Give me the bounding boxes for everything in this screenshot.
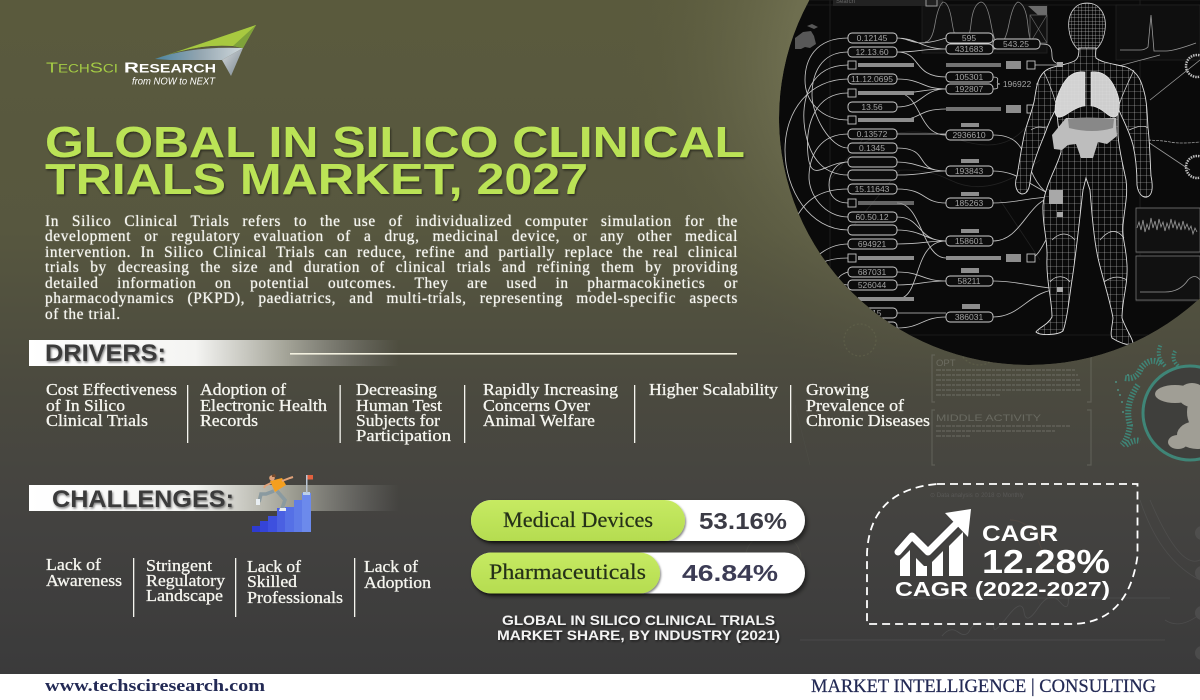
pill readouts column 2: 105301 xyxy=(955,72,983,82)
challenges heading: CHALLENGES: xyxy=(52,486,234,513)
description paragraph: development or regulatory evaluation of a drug, medicinal device, or any other medical xyxy=(45,228,738,245)
description paragraph: detailed information on potential outcomes. They are used in pharmacokinetics or xyxy=(45,275,738,292)
driver: animal welfare: Concerns Over xyxy=(483,396,591,415)
CAGR dashed callout: CAGR (2022-2027) xyxy=(895,579,1110,601)
drivers heading: DRIVERS: xyxy=(45,340,166,367)
driver: animal welfare: Rapidly Increasing xyxy=(483,380,618,399)
pill readouts column 2 xyxy=(946,33,1040,322)
footer xyxy=(0,674,1200,700)
logo xyxy=(46,25,256,88)
lungs xyxy=(1055,72,1119,117)
challenge: lack of awareness: Awareness xyxy=(46,571,122,590)
challenge: lack of adoption: Adoption xyxy=(364,573,431,592)
pill readouts column 1: 12.13.60 xyxy=(855,47,889,57)
description paragraph: trials by decreasing the size and duration of clinical trials and refining them by providing xyxy=(45,259,738,276)
pill readouts column 1: 60.50.12 xyxy=(855,212,889,222)
driver: cost effectiveness: Clinical Trials xyxy=(46,411,148,430)
pill readouts column 1: 0.13572 xyxy=(857,129,888,139)
abdominal organs xyxy=(1052,118,1117,158)
share caption: MARKET SHARE, BY INDUSTRY (2021) xyxy=(497,628,780,643)
waveform top xyxy=(925,2,1036,45)
pill readouts column 1: 687031 xyxy=(858,267,886,277)
driver: chronic diseases: Prevalence of xyxy=(806,396,905,415)
pill readouts column 2: 595 xyxy=(962,33,976,43)
connector lines xyxy=(785,38,1070,328)
driver: decreasing human test subjects: Participation xyxy=(356,426,451,445)
challenges heading xyxy=(29,485,399,513)
CAGR dashed callout: 12.28% xyxy=(982,543,1110,580)
challenge: stringent regulatory landscape: Regulatory xyxy=(146,571,226,590)
driver: decreasing human test subjects: Human Test xyxy=(356,396,442,415)
ghost HUD panels behind content xyxy=(745,324,1200,660)
description paragraph: pharmacodynamics (PKPD), paediatrics, and multi-trials, representing model-specific aspects xyxy=(45,290,738,307)
challenge: lack of skilled professionals: Lack of xyxy=(247,557,302,576)
pill readouts column 2: 185263 xyxy=(955,198,983,208)
pill readouts column 2: 431683 xyxy=(955,44,983,54)
driver: electronic health records: Electronic Health xyxy=(200,396,328,415)
driver: cost effectiveness: of In Silico xyxy=(46,396,125,415)
description paragraph: intervention. In Silico Clinical Trials can reduce, refine and partially replace the real clinical xyxy=(45,244,738,261)
driver: decreasing human test subjects: Decreasing xyxy=(356,380,437,399)
challenge: lack of awareness xyxy=(46,555,122,590)
right side charts xyxy=(1120,15,1200,292)
challenge: lack of skilled professionals: Skilled xyxy=(247,572,298,591)
title xyxy=(45,118,745,204)
pill readouts column 2: 192807 xyxy=(955,84,983,94)
share caption: GLOBAL IN SILICO CLINICAL TRIALS xyxy=(502,613,775,628)
driver: animal welfare xyxy=(483,380,618,430)
logo: from NOW to NEXT xyxy=(132,76,216,88)
challenge: stringent regulatory landscape: Landscape xyxy=(146,586,223,605)
footer: MARKET INTELLIGENCE | CONSULTING xyxy=(811,676,1156,697)
challenge: lack of skilled professionals: Professionals xyxy=(247,588,343,607)
share pill: medical devices: Medical Devices xyxy=(503,507,653,532)
pill readouts column 2: 196922 xyxy=(1003,79,1031,89)
circular medical HUD image xyxy=(779,0,1200,365)
share caption xyxy=(497,613,780,643)
driver: electronic health records: Records xyxy=(200,411,258,430)
search bar xyxy=(833,0,943,6)
pill readouts column 2: 158601 xyxy=(955,236,983,246)
pill readouts column 1: 0.1345 xyxy=(859,143,885,153)
driver: electronic health records xyxy=(200,380,328,430)
description paragraph: of the trial. xyxy=(45,306,121,323)
muscle contours xyxy=(1031,70,1148,282)
challenges list xyxy=(46,555,431,617)
share pill: medical devices: 53.16% xyxy=(699,508,787,534)
pill readouts column 1 xyxy=(848,33,897,332)
CAGR dashed callout xyxy=(867,484,1138,624)
driver: higher scalability: Higher Scalability xyxy=(649,380,779,399)
CAGR dashed callout: CAGR xyxy=(982,521,1058,546)
challenge: lack of adoption: Lack of xyxy=(364,557,419,576)
title: TRIALS MARKET, 2027 xyxy=(45,155,588,204)
level bars xyxy=(858,61,1021,309)
challenge: lack of awareness: Lack of xyxy=(46,555,102,574)
driver: chronic diseases xyxy=(806,380,930,430)
pill readouts column 2: 386031 xyxy=(955,312,983,322)
pill readouts column 2: 543.25 xyxy=(1003,39,1029,49)
ghost HUD panels behind content: OPT xyxy=(936,358,956,369)
share pill: medical devices xyxy=(471,500,805,541)
driver: decreasing human test subjects: Subjects for xyxy=(356,411,441,430)
driver: electronic health records: Adoption of xyxy=(200,380,287,399)
logo: R ESEARCH xyxy=(124,60,216,76)
DNA and world globe xyxy=(1115,344,1200,460)
driver: cost effectiveness xyxy=(46,380,177,430)
ghost HUD panels behind content: MIDDLE ACTIVITY xyxy=(936,413,1042,424)
driver: cost effectiveness: Cost Effectiveness xyxy=(46,380,177,399)
challenge: lack of skilled professionals xyxy=(247,557,343,607)
driver: decreasing human test subjects xyxy=(356,380,451,445)
drivers list xyxy=(46,380,930,445)
driver: chronic diseases: Chronic Diseases xyxy=(806,411,930,430)
node squares xyxy=(1049,62,1063,292)
description paragraph: In Silico Clinical Trials refers to the use of individualized computer simulation for the xyxy=(45,212,738,230)
pill readouts column 1: 0.12145 xyxy=(857,33,888,43)
pill readouts column 1: 15.11643 xyxy=(855,184,890,194)
challenge: stringent regulatory landscape: Stringent xyxy=(146,556,212,575)
pill readouts column 2: 193843 xyxy=(955,166,983,176)
drivers heading xyxy=(29,340,737,367)
driver: chronic diseases: Growing xyxy=(806,380,869,399)
share pill: pharmaceuticals xyxy=(471,552,805,594)
ghost HUD panels behind content: ⊙ Data analysis ⊙ 2018 ⊙ Monthly xyxy=(930,493,1024,499)
title: GLOBAL IN SILICO CLINICAL xyxy=(45,118,745,167)
icon: runner climbing stairs xyxy=(252,474,313,532)
pill readouts column 1: 1915 xyxy=(863,308,882,318)
footer: www.techsciresearch.com xyxy=(45,676,265,695)
logo: TECH S CI xyxy=(46,60,118,76)
share pill: pharmaceuticals: 46.84% xyxy=(682,560,778,586)
pill readouts column 1: 13.56 xyxy=(861,102,883,112)
description paragraph xyxy=(44,212,738,323)
lower waveform panels xyxy=(1136,208,1200,300)
icon: growth chart with arrow xyxy=(898,509,971,576)
pill readouts column 2: 2936610 xyxy=(952,130,986,140)
wireframe human body xyxy=(1016,3,1152,345)
map fragment xyxy=(795,24,818,49)
challenge: lack of adoption xyxy=(364,557,431,592)
challenge: stringent regulatory landscape xyxy=(146,556,226,605)
pill readouts column 1: 11.12.0695 xyxy=(851,74,893,84)
pill readouts column 1: 526044 xyxy=(858,280,886,290)
pill readouts column 2: 58211 xyxy=(957,276,981,286)
driver: animal welfare: Animal Welfare xyxy=(483,411,595,430)
share pill: pharmaceuticals: Pharmaceuticals xyxy=(489,559,646,584)
pill readouts column 1: 694921 xyxy=(858,239,886,249)
